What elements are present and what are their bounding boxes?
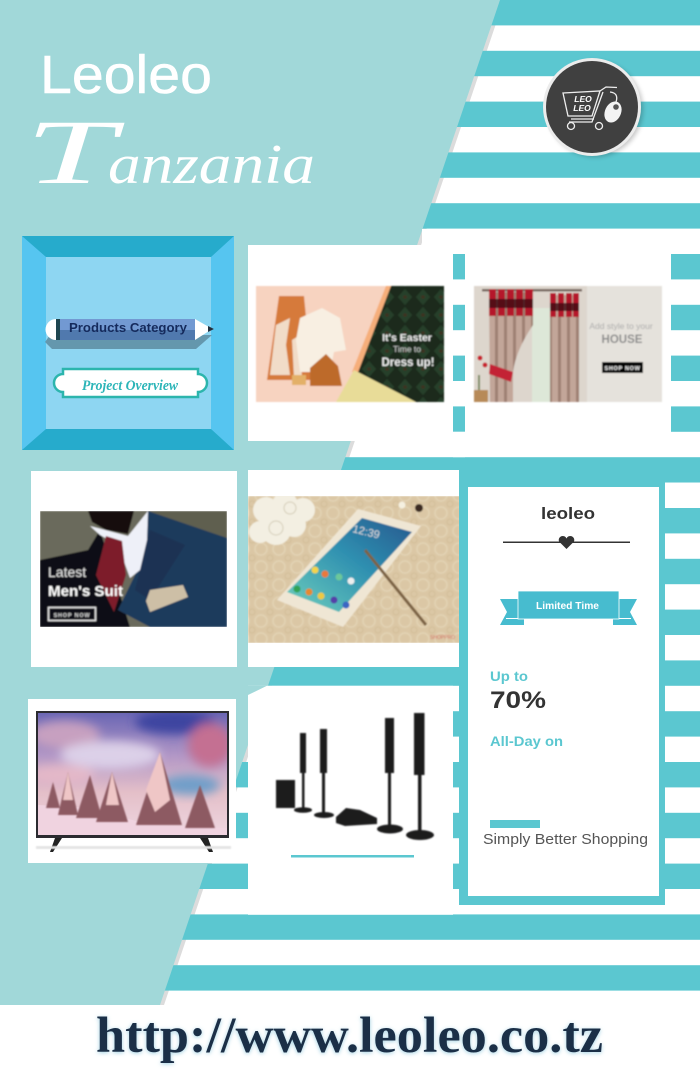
text: all-day on: All-Day on [490,733,563,749]
accent bar [490,820,540,828]
image: fashion banner: It's Easter [382,332,432,344]
text: up to: Up to [490,668,528,684]
image: television [25,710,232,852]
image: smartphone photo: SHOPPRO [430,635,455,641]
text: tagline: Simply Better Shopping [483,831,648,848]
image: men's suit banner [40,511,227,627]
heading: leoleo: leoleo [541,504,595,523]
logo: Leo Leo cart badge [543,58,643,157]
image: fashion banner: Time to [393,344,421,354]
panel: suit card [31,471,237,667]
panel: phone card [248,470,460,667]
underline [291,855,414,858]
image: curtains banner: SHOP NOW [604,366,641,372]
image: smartphone photo [248,492,460,643]
image: curtains banner: Add style to your [589,321,653,331]
text: 70%: 70% [490,687,546,714]
divider with heart [503,536,630,549]
image: fashion banner [256,286,444,402]
diagonal teal panel [0,0,500,1005]
ribbon: project overview [54,369,207,397]
image: curtains banner [474,286,662,402]
icon: pencil label: Products Category [69,320,188,335]
image: fashion banner: Dress up! [381,357,435,369]
title: Tanzania: anzania [108,134,315,196]
image: curtains banner: HOUSE [602,334,643,346]
image: men's suit banner: Men's Suit [48,584,123,600]
image: smartphone photo: 12:39 [351,523,381,542]
panel: speaker card [248,686,453,915]
diagonal panel shadow [0,0,504,1005]
image: home theatre speakers [276,713,434,840]
striped background [100,0,700,991]
ribbon: project overview: Project Overview [82,378,179,394]
image: men's suit banner: Latest [48,564,86,580]
panel: products category frame [22,236,234,450]
ribbon: limited time [500,591,637,625]
panel: top product cards [248,229,671,457]
image: men's suit banner: SHOP NOW [54,613,90,619]
ribbon: limited time: Limited Time [536,601,599,612]
icon: pencil label [45,319,214,349]
footer URL: http://www.leoleo.co.tz [96,1008,603,1064]
logo: Leo Leo cart badge: LEO [573,103,591,113]
panel: TV card [28,699,236,863]
title: Leoleo: Leoleo [40,45,212,105]
panel: limited time offer [459,470,700,905]
title: Tanzania: T [25,101,125,203]
logo: Leo Leo cart badge: LEO [574,94,592,104]
